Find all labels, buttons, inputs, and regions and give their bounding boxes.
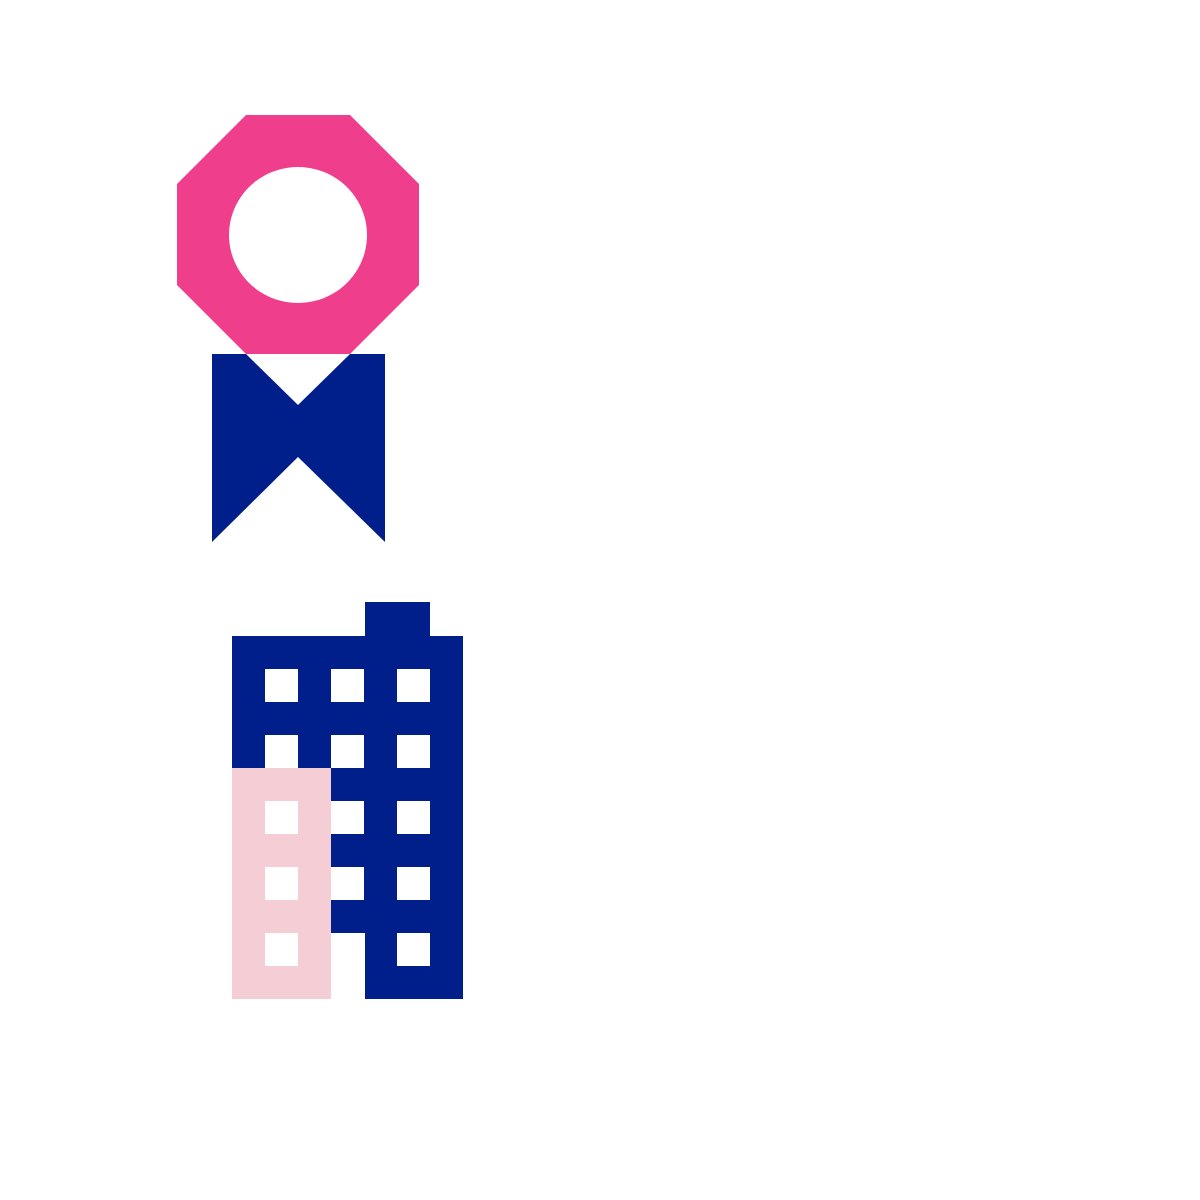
- icon: building: [232, 602, 463, 999]
- building: windows: [265, 669, 430, 966]
- building: pink block: [232, 768, 331, 999]
- icon: pink octagon ring: [177, 115, 419, 354]
- icon: navy bowtie body: [212, 354, 385, 542]
- building: navy tower: [232, 602, 463, 999]
